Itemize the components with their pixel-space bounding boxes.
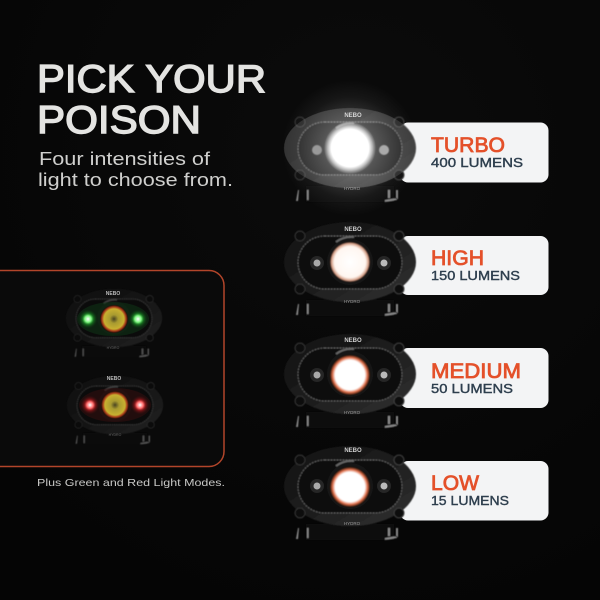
label card: medium: MEDIUM: [431, 360, 521, 383]
headlamp: medium: [284, 334, 416, 428]
label card: high: 150 LUMENS: [431, 268, 520, 283]
headlamp: green mode: NEBO: [106, 291, 120, 297]
headlamp: high: NEBO: [344, 227, 362, 233]
panel caption: Plus Green and Red Light Modes.: [37, 477, 225, 489]
headlamp: turbo: NEBO: [344, 113, 362, 119]
row: turbo: [282, 80, 548, 216]
headlamp: red mode: [67, 376, 163, 444]
title: [37, 58, 266, 142]
headlamp: red mode: NEBO: [107, 376, 121, 382]
label card: turbo: [400, 122, 548, 182]
headlamp: green mode: HYDRO: [107, 346, 120, 350]
headlamp: medium: HYDRO: [344, 410, 361, 415]
subtitle: Four intensities of: [39, 148, 211, 169]
headlamp: low: [284, 446, 416, 540]
label card: turbo: TURBO: [431, 134, 505, 157]
row: high: [284, 222, 548, 316]
panel: green and red light modes: [0, 270, 224, 466]
row: medium: [284, 334, 548, 428]
label card: medium: [400, 348, 548, 408]
headlamp: turbo: HYDRO: [344, 186, 361, 191]
headlamp: medium: NEBO: [344, 338, 362, 344]
subtitle: [38, 148, 233, 190]
headlamp: low: NEBO: [344, 448, 362, 454]
headlamp: high: HYDRO: [344, 299, 361, 304]
label card: low: [400, 461, 548, 520]
label card: high: HIGH: [431, 247, 484, 270]
title: PICK YOUR: [37, 58, 266, 101]
label card: turbo: 400 LUMENS: [431, 155, 523, 170]
title: POISON: [37, 99, 201, 142]
label card: medium: 50 LUMENS: [431, 381, 513, 396]
headlamp: high: [284, 222, 416, 316]
row: low: [284, 446, 548, 540]
label card: low: LOW: [431, 472, 479, 495]
label card: low: 15 LUMENS: [431, 493, 509, 508]
headlamp: red mode: HYDRO: [109, 433, 122, 437]
subtitle: light to choose from.: [38, 169, 233, 190]
headlamp: turbo: [282, 80, 418, 216]
label card: high: [400, 236, 548, 295]
headlamp: low: HYDRO: [344, 521, 361, 526]
headlamp: green mode: [66, 289, 162, 357]
